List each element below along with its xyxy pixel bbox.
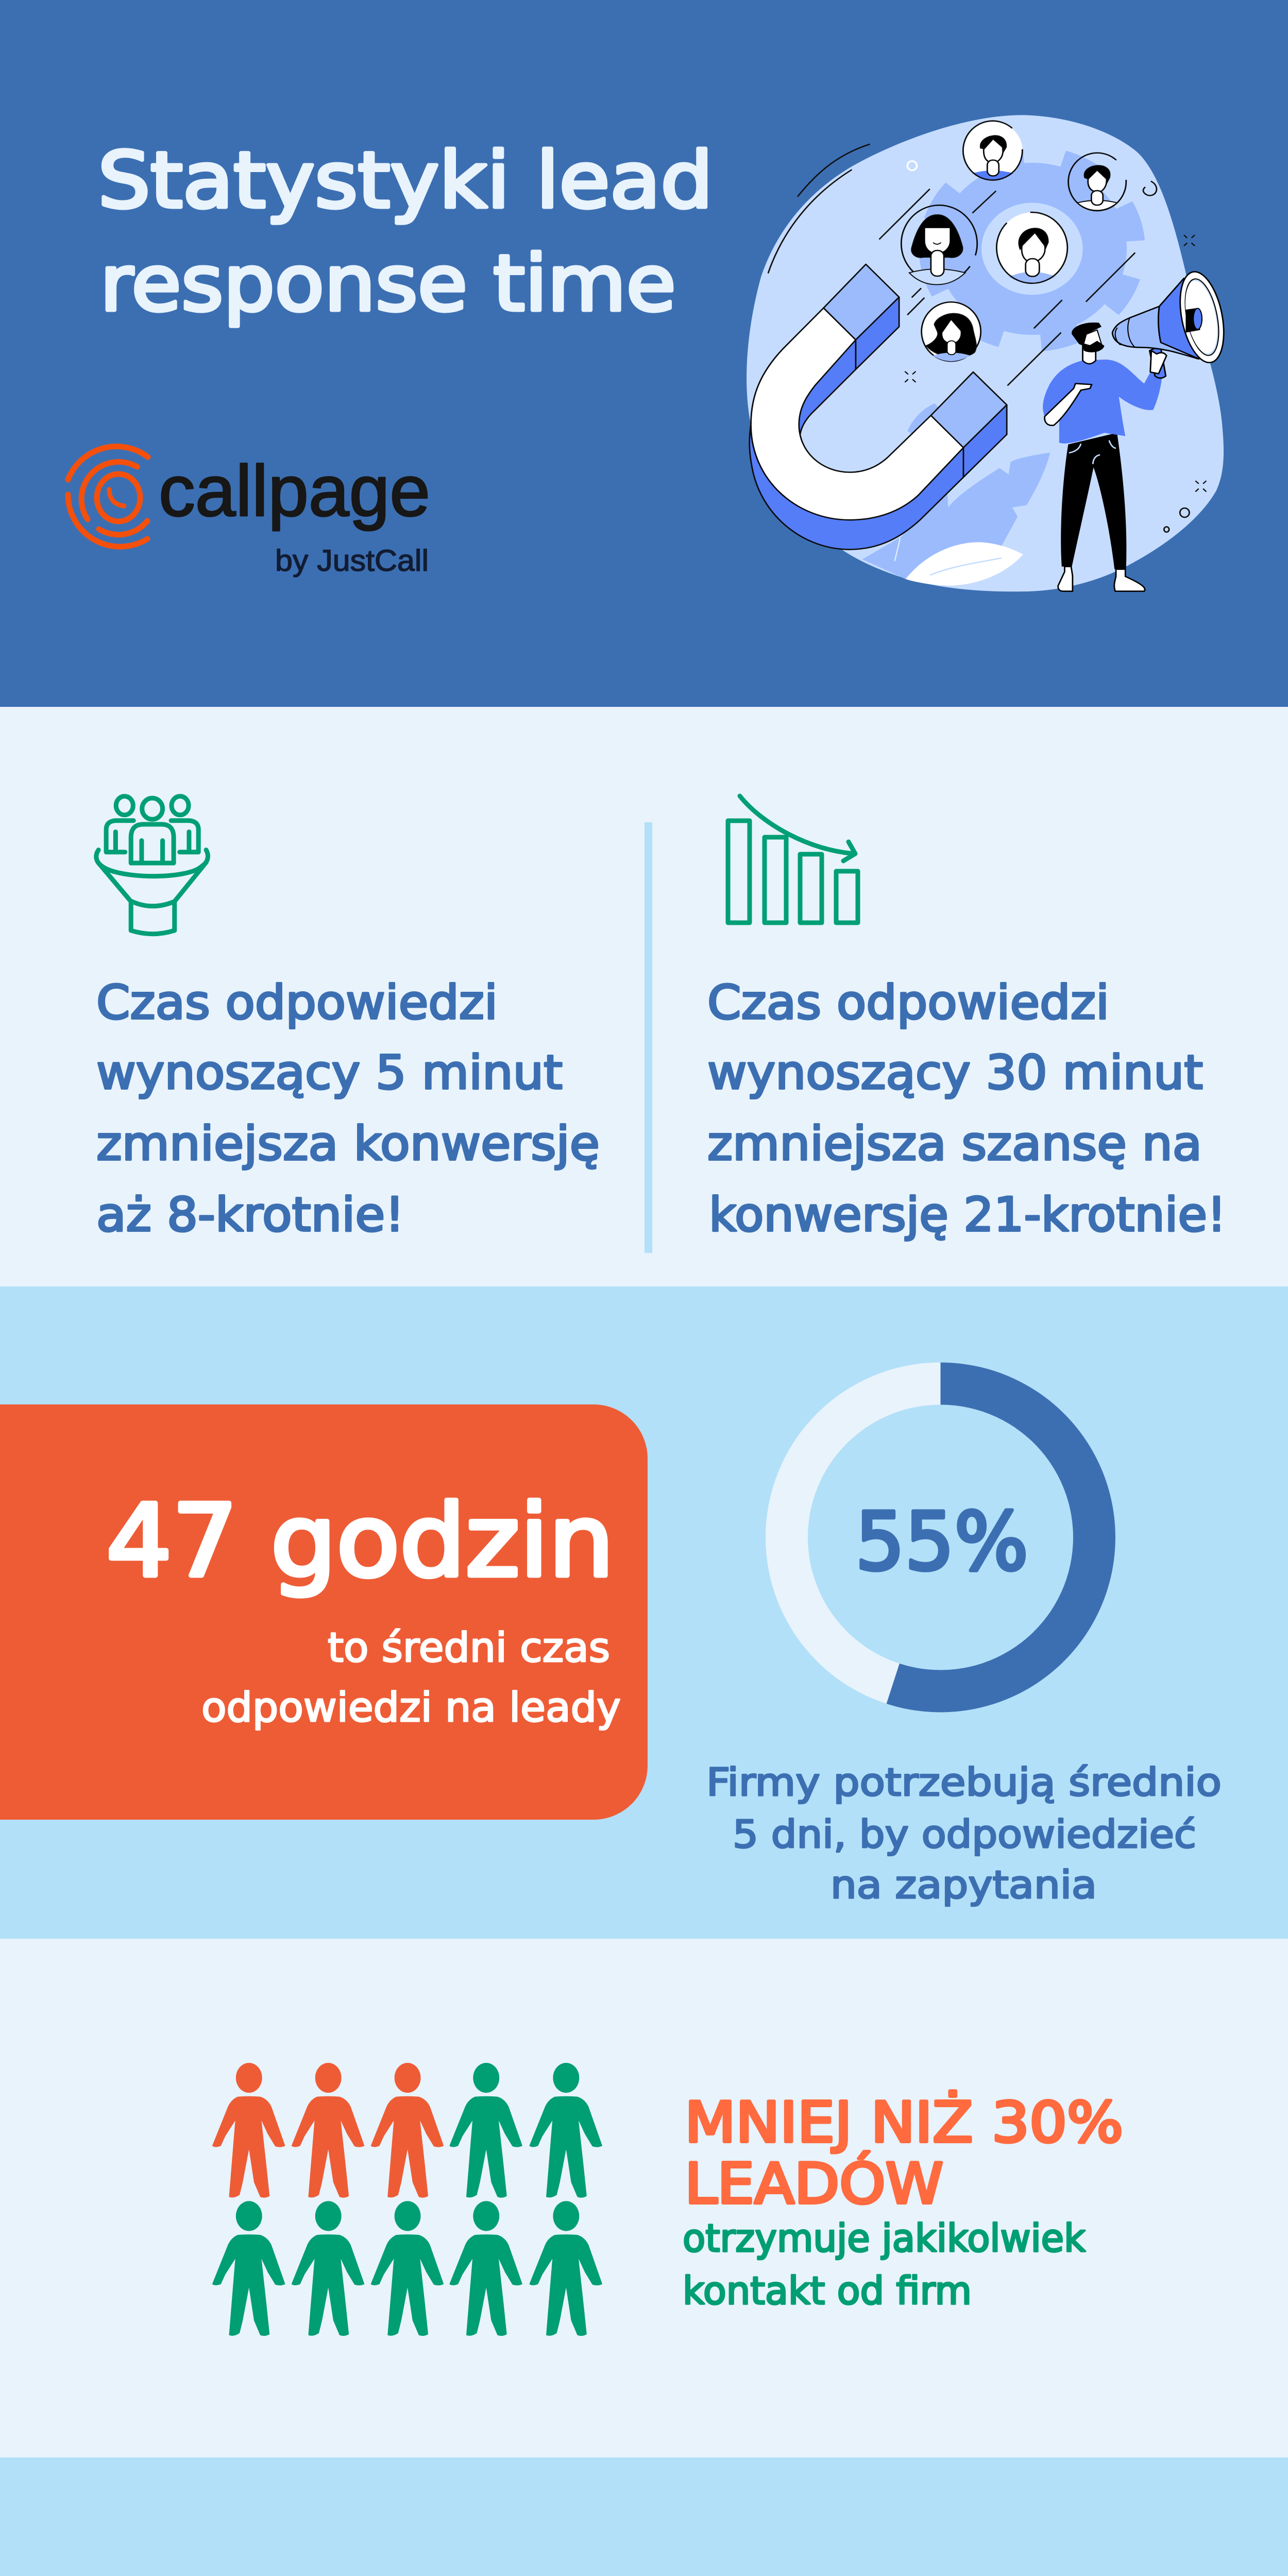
callout: 47 hours: 47 godzin [106,1483,614,1599]
heading: less than 30% [685,2090,1123,2216]
callout: 47 hours [0,1404,648,1820]
head [1083,346,1096,364]
pictogram: ten people, three highlighted [212,2063,602,2336]
motion lines [768,144,1135,385]
avatar 3 [901,205,977,284]
icon: callpage rings [68,447,148,547]
text: 30 minutes: zmniejsza szansę na [707,1117,1202,1171]
text: companies need 5 days: 5 dni, by odpowiedzieć [733,1812,1196,1857]
text: companies need 5 days: na zapytania [831,1863,1097,1907]
avatars [901,121,1126,361]
heading: less than 30%: LEADÓW [685,2151,943,2216]
title [98,136,713,329]
megaphone [1149,346,1166,378]
text: 5 minutes: aż 8-krotnie! [96,1188,404,1242]
shoes [1058,567,1145,591]
panel: 90% of leads [0,2458,1288,2576]
text: 5 minutes: zmniejsza konwersję [96,1117,600,1171]
logo: callpage by JustCall [68,447,430,578]
divider [645,822,652,1253]
small decorations [905,161,1206,532]
background blob [747,115,1224,591]
panel: less than 30% of leads [0,1939,1288,2458]
leaf shapes [862,452,1050,586]
avatar 1 [963,121,1023,181]
text: 30 minutes: konwersję 21-krotnie! [709,1188,1226,1242]
text: 30 minutes: Czas odpowiedzi [707,976,1109,1030]
text: 5 minutes: Czas odpowiedzi [96,976,498,1030]
sweater [1043,360,1162,444]
pants [1061,433,1126,569]
callout: 47 hours: odpowiedzi na leady [201,1685,621,1731]
gear [930,156,1134,342]
avatar 4 [996,212,1067,283]
logo: callpage by JustCall: callpage [159,450,430,531]
magnet [750,264,1007,550]
text: 30 minutes: wynoszący 30 minut [707,1046,1203,1100]
panel: hero header [0,0,1288,707]
icon: people funnel [96,796,208,934]
donut chart: 55% [787,1362,1115,1713]
illustration: magnet attracting people and man with megaphone [747,115,1231,591]
avatar 2 [1069,153,1126,211]
text: 5 minutes [96,976,600,1242]
panel: average response stats [0,1286,1288,1939]
text: receive any contact: kontakt od firm [683,2269,972,2313]
heading: less than 30%: MNIEJ NIŻ 30% [685,2090,1123,2155]
logo: callpage by JustCall: by JustCall [275,544,429,578]
donut chart: 55%: 55% [855,1495,1028,1588]
panel: response time comparison [0,707,1288,1286]
man with megaphone [1043,268,1231,591]
callout: 47 hours: to średni czas [328,1625,610,1671]
title: response time [100,239,676,329]
text: 30 minutes [707,976,1226,1242]
avatar 5 [922,302,981,361]
arm [1045,383,1092,426]
text: companies need 5 days: Firmy potrzebują średnio [706,1760,1222,1805]
text: receive any contact [683,2216,1086,2313]
text: 5 minutes: wynoszący 5 minut [96,1046,563,1100]
text: receive any contact: otrzymuje jakikolwiek [683,2216,1086,2261]
text: companies need 5 days [706,1760,1222,1907]
title: Statystyki lead [98,136,713,226]
icon: declining bars with arrow [728,796,858,923]
